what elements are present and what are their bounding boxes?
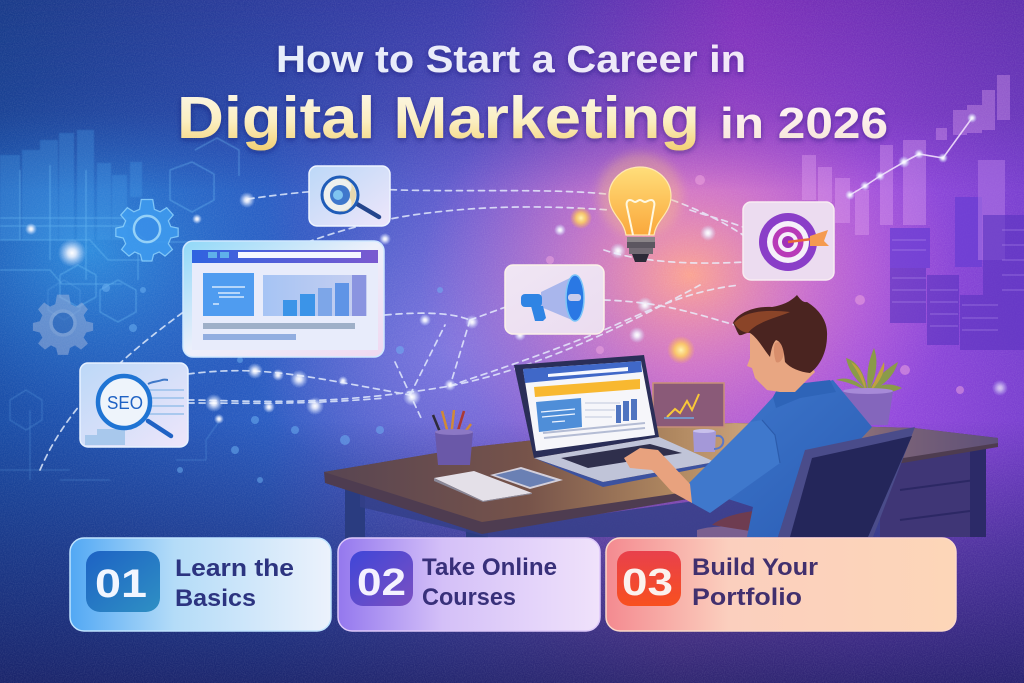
hair: [733, 295, 827, 373]
torso: [700, 380, 872, 537]
icon: megaphone: [521, 275, 584, 321]
title: first line: How to Start a Career in: [276, 39, 746, 81]
sleeve: [685, 420, 780, 513]
icon: light bulb: [598, 153, 682, 262]
chair: [778, 427, 915, 537]
trousers: [712, 511, 754, 531]
step text: Basics: [175, 585, 256, 612]
coffee mug: [693, 429, 723, 452]
title: second line: [177, 85, 888, 151]
number badge: [350, 551, 413, 606]
step card 03: [606, 538, 956, 631]
ear: [774, 342, 784, 362]
icon: blue gear: [116, 199, 178, 261]
step text: Portfolio: [692, 584, 802, 611]
text block thumbnail: [203, 273, 254, 316]
step card 01: [70, 538, 331, 631]
icon: magnifier: SEO: [107, 393, 143, 413]
icon: magnifier: [322, 177, 379, 217]
right city skyline: [802, 75, 1024, 350]
step text: [422, 554, 557, 611]
title: second line: Digital Marketing: [177, 85, 700, 151]
collar: [773, 380, 836, 408]
person: [624, 295, 872, 537]
step text: Courses: [422, 584, 516, 611]
icon: grey gear: [33, 295, 93, 355]
number badge: [86, 551, 160, 612]
card: small magnifier: [309, 166, 390, 226]
small chart monitor: [653, 383, 724, 427]
panel: dashboard window: [183, 241, 384, 357]
forearm and hand: [624, 448, 692, 503]
plant: [836, 348, 902, 425]
step text: [175, 555, 294, 612]
number badge: 02: [357, 562, 406, 604]
network nodes: [102, 175, 1008, 483]
laptop: [514, 355, 715, 487]
desk: [324, 423, 998, 540]
step card 02: [338, 538, 600, 631]
network dashed lines: [40, 189, 770, 470]
title: second line: in 2026: [720, 99, 888, 148]
icon: target: [759, 213, 829, 271]
glowing node on left: [25, 223, 86, 267]
card: SEO magnifier: [80, 363, 188, 447]
seat and trousers: [697, 526, 750, 537]
number badge: 01: [95, 562, 147, 606]
bar chart: [263, 275, 367, 316]
step text: Learn the: [175, 555, 294, 582]
step text: Take Online: [422, 554, 557, 581]
left data skyline: [0, 130, 239, 480]
neck and face: [747, 325, 815, 392]
number badge: 03: [622, 562, 673, 604]
step text: [692, 554, 818, 611]
pen cup: [433, 410, 473, 465]
step text: Build Your: [692, 554, 818, 581]
desk drawers: [880, 445, 986, 537]
notebook and tablet: [434, 467, 563, 502]
number badge: [617, 551, 681, 606]
card: target: [743, 202, 834, 280]
card: megaphone: [505, 265, 604, 334]
